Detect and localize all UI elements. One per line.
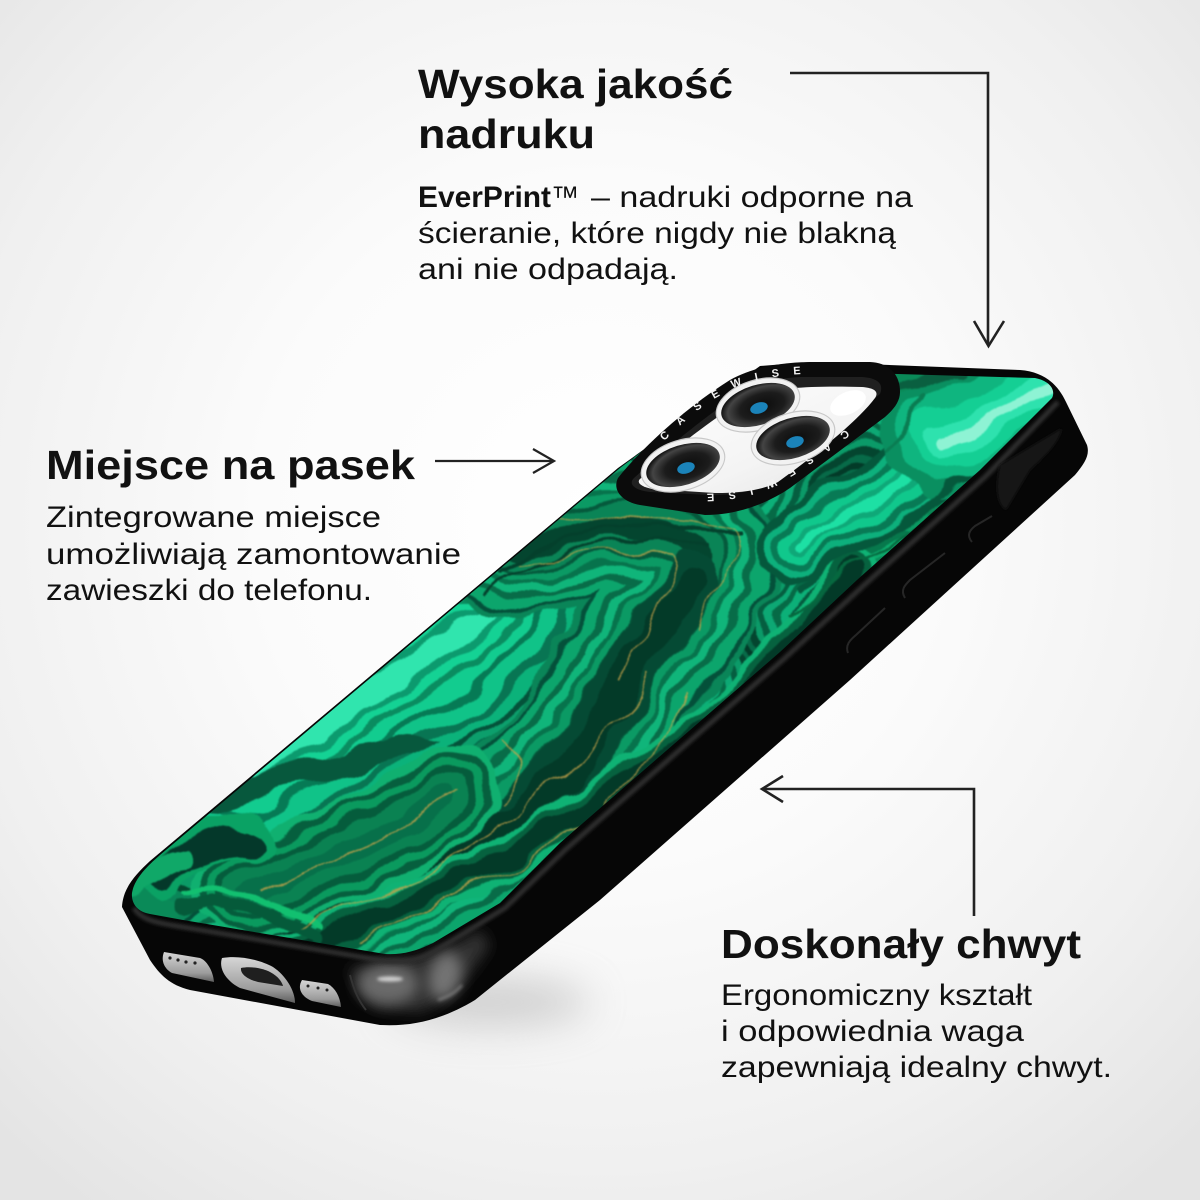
dark wedge <box>205 738 445 815</box>
lens left <box>635 429 731 501</box>
rim highlight <box>134 402 1058 961</box>
heading: Miejsce na pasek <box>46 442 415 488</box>
case body <box>122 362 1088 1025</box>
central dark vein family <box>170 528 699 1000</box>
phone shadow <box>390 978 590 1026</box>
body text: ścieranie, które nigdy nie blakną <box>418 217 896 250</box>
volume button lower <box>847 608 885 653</box>
callout: print quality <box>418 61 913 286</box>
arrow: grip <box>762 776 974 916</box>
upper left bright swirl <box>250 612 490 770</box>
camera opening <box>639 387 876 493</box>
bright lens top right <box>795 468 925 545</box>
mint streak top right <box>940 392 1042 440</box>
casewise lettering bottom: CASEWISE <box>707 430 849 502</box>
vein near camera <box>885 395 925 455</box>
dark lines below lens <box>788 474 975 618</box>
arrow: strap slot <box>435 449 554 473</box>
heading: Wysoka jakość <box>418 61 733 107</box>
right vein family <box>698 419 884 710</box>
corner sheen <box>350 930 490 1012</box>
charging port <box>221 957 295 1003</box>
body text: zawieszki do telefonu. <box>46 574 372 607</box>
left speaker <box>163 952 214 982</box>
top thin contours <box>480 523 740 590</box>
callout: grip <box>721 921 1112 1084</box>
phone case illustration <box>122 362 1088 1026</box>
casewise lettering top: CASEWISE <box>660 366 800 440</box>
body text: Zintegrowane miejsce <box>46 501 381 534</box>
lens right <box>745 402 841 474</box>
body text: i odpowiednia waga <box>721 1015 1024 1048</box>
right speaker <box>300 980 341 1007</box>
bottom lens <box>245 795 448 895</box>
heading <box>418 61 733 157</box>
body text: zapewniają idealny chwyt. <box>721 1051 1112 1084</box>
callout: strap slot <box>46 442 461 607</box>
dark streak near camera <box>895 372 960 385</box>
body text: Ergonomiczny kształt <box>721 979 1033 1012</box>
body text <box>418 181 913 286</box>
camera inner wall <box>632 377 881 495</box>
action button <box>969 516 992 542</box>
lens top <box>710 369 806 441</box>
bottom ports <box>163 952 341 1007</box>
flash <box>826 385 870 421</box>
gold veins <box>260 515 738 940</box>
power button <box>997 428 1062 510</box>
body text: – nadruki odporne na <box>591 181 913 214</box>
arrow: print quality <box>790 73 1004 346</box>
heading: nadruku <box>418 111 595 157</box>
body text: ™ <box>551 181 579 214</box>
volume button upper <box>903 553 945 598</box>
bottom corner dark <box>135 838 330 935</box>
body text: umożliwiają zamontowanie <box>46 538 461 571</box>
camera bump <box>616 362 900 515</box>
body text <box>46 501 461 607</box>
body text <box>721 979 1112 1084</box>
lower right bands <box>866 514 928 559</box>
body text: ani nie odpadają. <box>418 253 678 286</box>
heading: Doskonały chwyt <box>721 921 1081 967</box>
lower dark streak <box>280 570 860 960</box>
camera block <box>616 362 900 515</box>
body text: EverPrint <box>418 181 551 214</box>
marble print <box>132 374 1054 954</box>
